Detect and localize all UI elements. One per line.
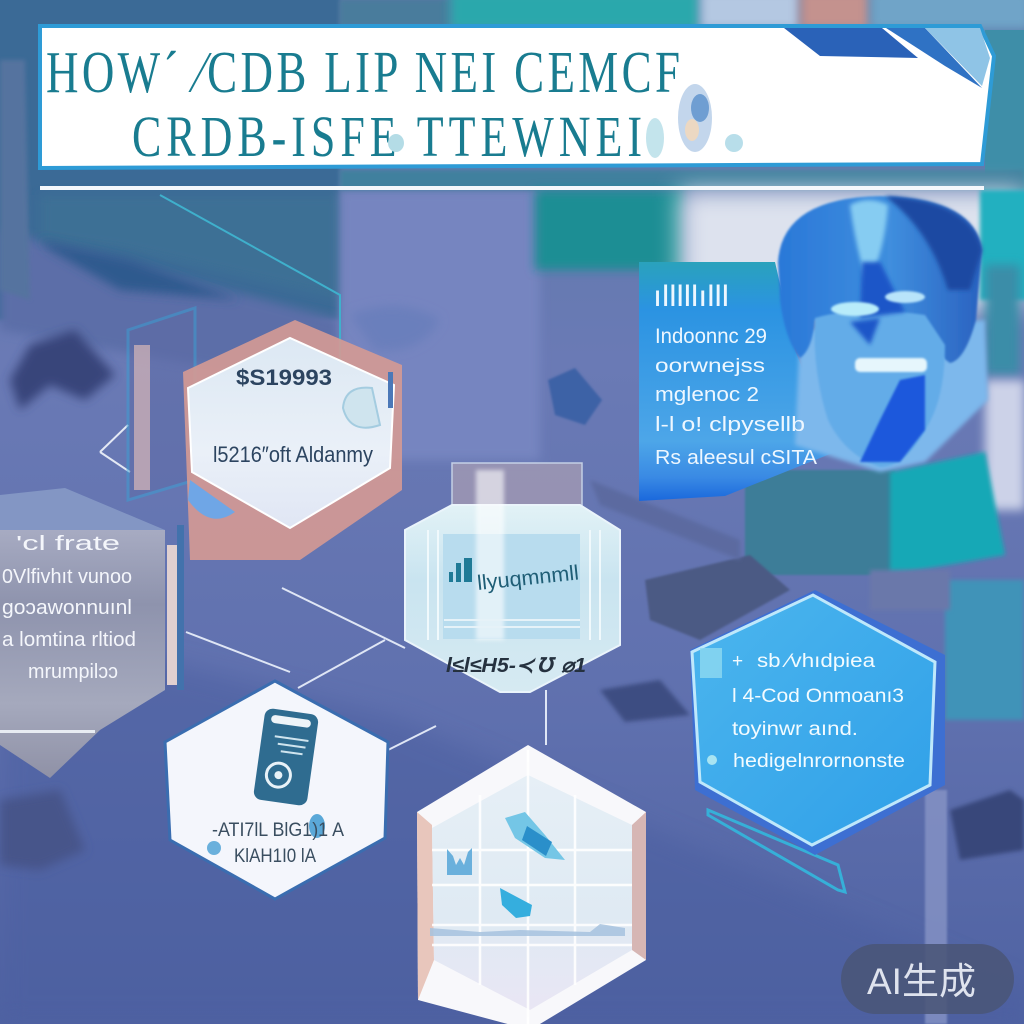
- panel: glass hexagon with chart: l≤l≤H5-≺℧ ⌀1: [446, 655, 586, 677]
- title icon: [388, 84, 743, 158]
- icon: device: [253, 708, 319, 806]
- panel: blue hexagon right: sb ⁄vhıdpiea: [757, 651, 876, 672]
- cyan accent line: [160, 195, 340, 370]
- divider rule: [40, 186, 984, 190]
- panel: hexagon stat top left: [100, 308, 402, 560]
- panel: blue hexagon right: [690, 590, 945, 892]
- watermark badge: [841, 944, 1014, 1014]
- panel: white hexagon with device icon: -ATI7lL BlG1)1 A: [212, 820, 344, 841]
- blue panel text: Rs aleesul cSITA: [655, 447, 818, 469]
- panel: glass hexagon with chart: llyuqmnmll: [476, 561, 580, 595]
- banner corner decoration: [784, 28, 990, 88]
- panel: blue text top right: [639, 262, 835, 501]
- panel: blue hexagon right: +: [732, 651, 743, 672]
- panel: blue hexagon right: hedigelnrornonste: [733, 751, 905, 772]
- panel: white hexagon with device icon: [165, 681, 388, 899]
- blue panel text: oorwnejss: [655, 356, 765, 377]
- panel: grey text left: [0, 488, 184, 778]
- panel: blue hexagon right: toyinwr aınd.: [732, 719, 858, 740]
- panel: white hexagon with device icon: KlAH1I0 lA: [234, 846, 316, 867]
- connector lines: [186, 588, 546, 750]
- title text: [46, 40, 680, 170]
- panel: hexagon stat top left: $S19993: [236, 365, 332, 390]
- panel: blue hexagon right: l 4-Cod Onmoanı3: [732, 686, 904, 707]
- panel: grey text left: mrumpilɔɔ: [28, 661, 118, 683]
- blue panel text: Indoonnc 29: [655, 325, 767, 348]
- panel: grey text left: 0Vlfivhıt vunoo: [2, 566, 132, 588]
- panel: grey text left: 'cl frate: [16, 533, 120, 555]
- title banner: [40, 26, 994, 170]
- title text: CRDB-ISFE TTEWNEI: [132, 105, 642, 170]
- panel: hexagon stat top left: l5216″oft Aldanmy: [213, 442, 373, 467]
- bar chart: [449, 558, 472, 582]
- blue panel text: l-l o! clpysellb: [655, 414, 805, 436]
- blue panel text: mglenoc 2: [655, 384, 759, 406]
- title text: HOW´ ⁄CDB LIP NEI CEMCF: [46, 40, 680, 106]
- panel: glass hexagon with chart: [405, 463, 620, 692]
- panel: grey text left: goɔawonnuınl: [2, 597, 132, 619]
- panel: glass hexagon bottom: [417, 745, 646, 1024]
- blue panel text: ılllllılll: [653, 280, 729, 313]
- panel: grey text left: a lomtina rltiod: [2, 629, 136, 651]
- watermark badge: AI生成: [867, 961, 976, 1002]
- blue panel text: [653, 280, 818, 469]
- panel: blue face: [778, 196, 988, 472]
- bar chart: [447, 848, 472, 875]
